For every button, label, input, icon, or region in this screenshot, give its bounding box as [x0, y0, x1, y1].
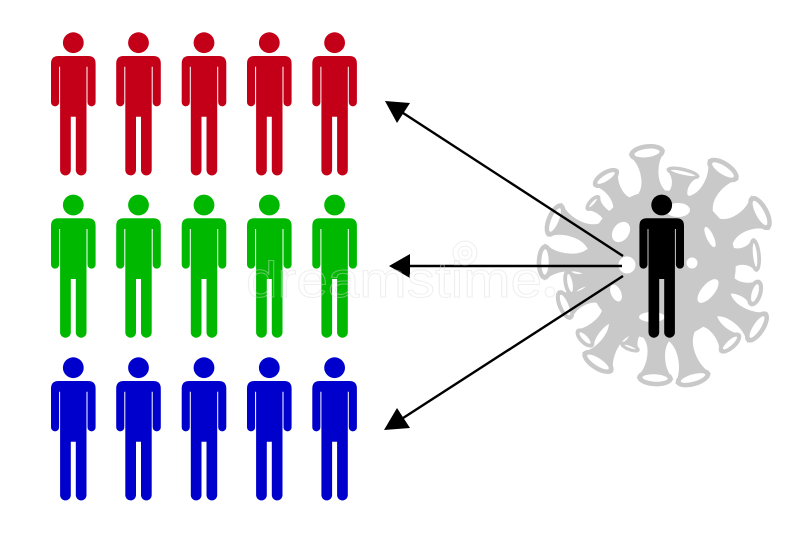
blue person 4: [247, 357, 292, 500]
group: green people row: [51, 195, 357, 338]
red person 2: [116, 32, 161, 175]
watermark: dreamstime: [246, 252, 542, 308]
arrow: to red group: [385, 101, 623, 256]
red person 5: [312, 32, 357, 175]
green person 4: [247, 195, 292, 338]
group: red people row: [51, 32, 357, 175]
blue person 3: [182, 357, 226, 500]
blue person 2: [116, 357, 161, 500]
red person 1: [51, 32, 96, 175]
green person 3: [182, 195, 226, 338]
arrow: to blue group: [384, 276, 623, 430]
blue person 5: [312, 357, 357, 500]
group: blue people row: [51, 357, 357, 500]
blue person 1: [51, 357, 96, 500]
arrow: to green group: [389, 254, 622, 278]
green person 2: [116, 195, 161, 338]
red person 4: [247, 32, 292, 175]
icon: grey coronavirus: [537, 142, 781, 393]
green person 5: [312, 195, 357, 338]
red person 3: [182, 32, 226, 175]
green person 1: [51, 195, 96, 338]
icon: black infected person: [639, 195, 684, 338]
